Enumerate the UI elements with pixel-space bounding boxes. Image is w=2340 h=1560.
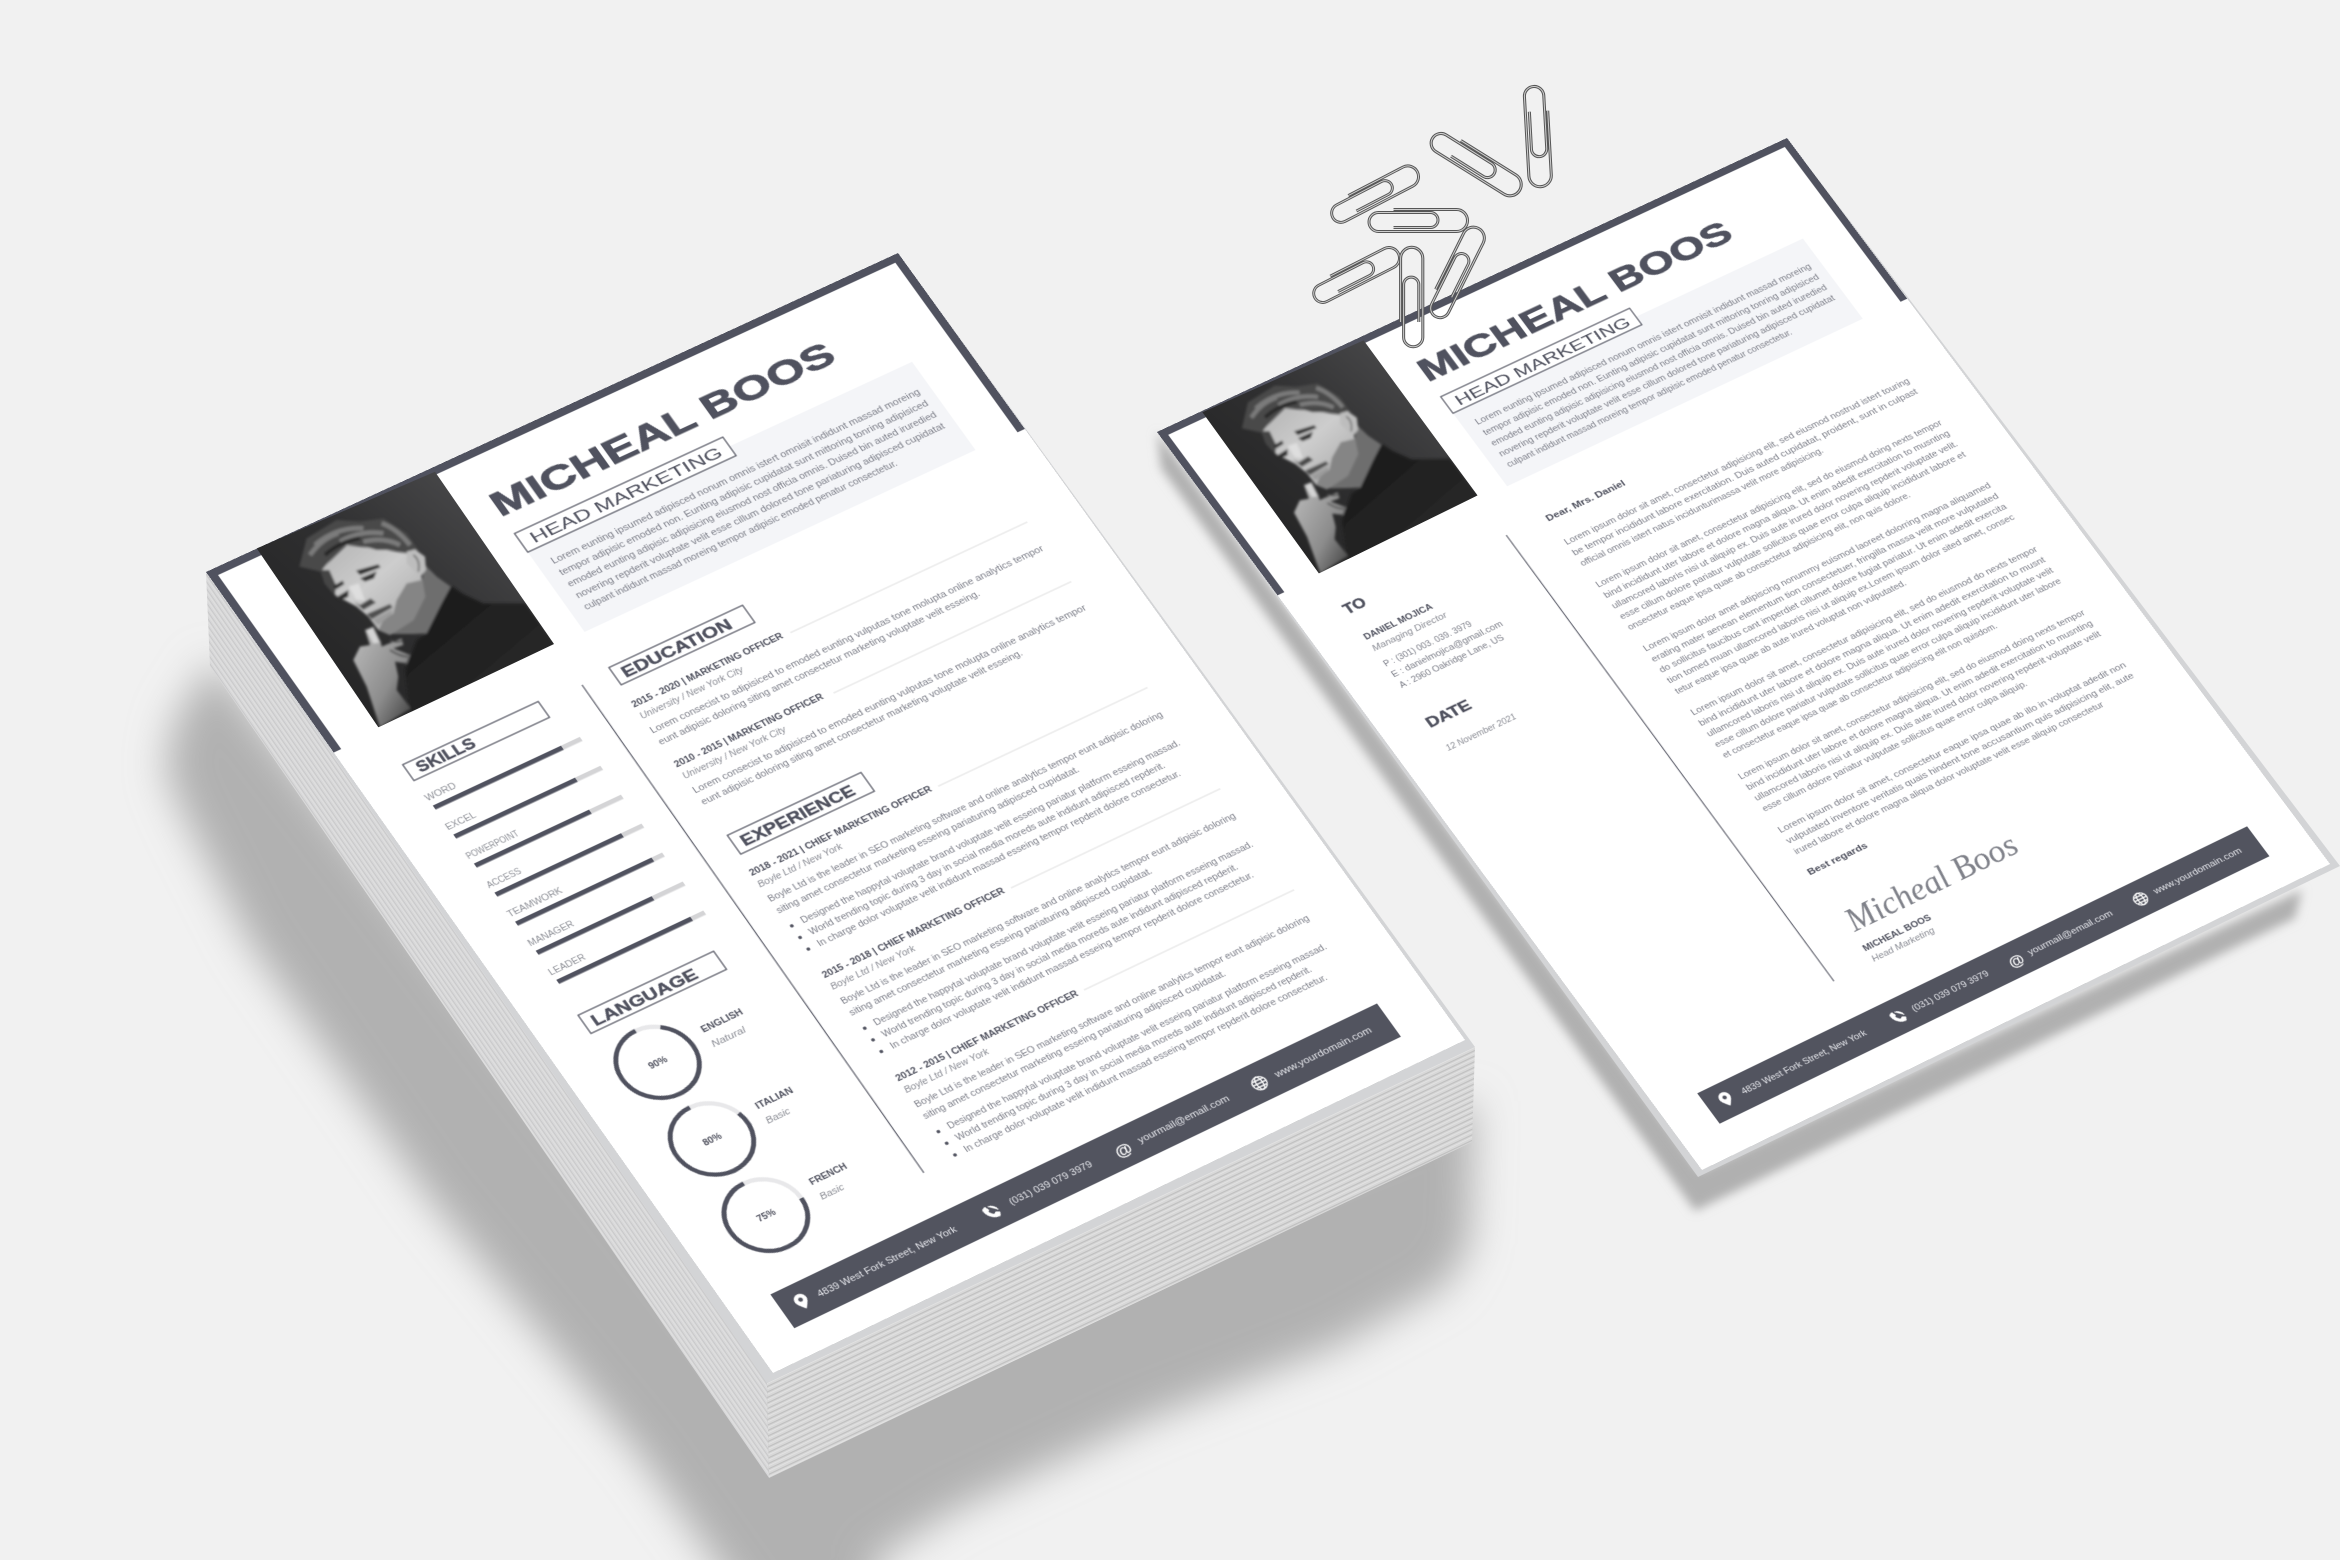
- paragraph 6: [1776, 660, 2144, 856]
- contact footer: www.yourdomain.com: [2155, 849, 2253, 898]
- gauge: english 90%: [577, 976, 779, 1130]
- paper clip 2: [1427, 127, 1526, 200]
- paper clip 6: [1401, 247, 1423, 347]
- paragraph 1: official omnis istert natus incidunturimassa velit more adipisicing.: [1582, 449, 1839, 569]
- date block: [1423, 685, 1518, 753]
- gauge: italian 80%: [639, 1058, 827, 1200]
- experience section: EXPERIENCE: [737, 785, 860, 849]
- gauge: english 90%: 90%: [643, 1049, 666, 1065]
- job 3: [894, 886, 1352, 1160]
- paragraph 4: et consectetur eaque ipsa quae ab consectetur adipisicing elit non quisdom.: [1721, 625, 2011, 760]
- skill: excel: [443, 754, 603, 839]
- recipient block: DANIEL MOJICA: [1359, 601, 1435, 641]
- contact footer: 4839 West Fork Street, New York: [808, 1217, 953, 1287]
- paragraph 2: bind incididunt uter labore et dolore magna aliqua. Ut enim adedit exercitation to musnting: [1605, 432, 1970, 601]
- paragraph 4: Lorem ipsum dolor sit amet, consectetur adipisicing elit, sed do eiusmod do nexts tempor: [1690, 549, 2055, 718]
- job 2: [820, 784, 1277, 1057]
- divider line: [578, 685, 928, 1173]
- skills section: [402, 696, 706, 985]
- paragraph 5: Lorem ipsum dolor sit amet, consectetur adipisicing elit, sed do eiusmod doing nexts tempor: [1736, 612, 2102, 781]
- paragraph 6: Lorem ipsum dolor sit amet, consectetur eaque ipsa quae ab illo in voluptat adedit non: [1775, 665, 2142, 834]
- education section: [606, 485, 1100, 807]
- gauge: french 75%: 75%: [749, 1198, 773, 1214]
- skill: teamwork: TEAMWORK: [503, 883, 563, 915]
- job 3: Designed the happytal voluptate brand voluptate velit esseing pariatur platform esseing massad.: [941, 945, 1333, 1126]
- recipient block: [1340, 553, 1513, 690]
- paragraph 1: [1562, 376, 1928, 568]
- contact footer: (031) 039 079 3979: [1002, 1155, 1090, 1200]
- education entry 2: [672, 576, 1100, 807]
- date block: DATE: [1419, 697, 1473, 729]
- photos and paper clips: [257, 84, 1553, 728]
- education section: EDUCATION: [620, 620, 739, 682]
- job 3: World trending topic during 3 day in social media moreds aute indidunt adipisced repderit.: [949, 967, 1317, 1137]
- paper clip 5: [1309, 244, 1403, 306]
- paper clip 7: [1425, 223, 1488, 321]
- summary panel: emoded eunting adipisic adipisicing eiusmod nost officia omnis. Duised bin auted iruredied: [567, 414, 948, 590]
- shadow: cover letter: [1157, 432, 2302, 1211]
- education entry 2: University / New York City: [681, 726, 791, 781]
- job 1: Designed the happytal voluptate brand voluptate velit esseing pariatur platform esseing massad.: [797, 743, 1189, 924]
- skill: manager: [526, 870, 685, 956]
- paper clip 3: [1327, 162, 1422, 226]
- skill: manager: MANAGER: [523, 916, 574, 944]
- job 1: Boyle Ltd / New York: [755, 842, 846, 888]
- paragraph 5: bind incididunt uter labore et dolore magna aliqua. Ut enim adedit exercitation to musnting: [1744, 623, 2109, 792]
- paragraph 3: erating mater aenean elementum tion consectetuer, fringilla massa velit more vulputated: [1651, 495, 2018, 665]
- paragraph 5: esse cillum dolore pariatur vulputate sollicitus quae error culpa aliquip.: [1759, 682, 2039, 813]
- contact footer: yourmail@email.com: [1133, 1092, 1230, 1142]
- paragraph 3: do sollicitus faucibus cant imperdiet cillumet dolore fugiat pariatur. Ut enim adedit exercita: [1659, 506, 2025, 675]
- job 2: Boyle Ltd / New York: [826, 942, 918, 989]
- paragraph 2: ullamcored laboris nisi ut aliquip ex. Duis aute irured dolor novering repderit voluptate velit.: [1612, 443, 1977, 612]
- job 2: World trending topic during 3 day in social media moreds aute indidunt adipisced repderit.: [877, 866, 1245, 1036]
- paragraph 6: irured labore et dolore magna aliqua dolor voluptate velit esse aliquip consectetur: [1790, 704, 2117, 855]
- recipient block: Managing Director: [1367, 610, 1450, 652]
- skill: powerpoint: [464, 783, 624, 868]
- skill: word: [423, 725, 583, 810]
- job 3: In charge dolor voluptate velit indidunt massad esseing tempor repderit dolore consectetur.: [957, 975, 1332, 1149]
- skill: powerpoint: POWERPOINT: [463, 827, 520, 858]
- education entry 2: Lorem consecist to adipisiced to emoded eunting vulputas tone molupta online analytics tempor: [691, 608, 1097, 795]
- education entry 1: [630, 517, 1056, 747]
- paragraph 2: esse cillum dolore pariatur vulputate sollicitus quae error culpa aliquip incididunt labore et: [1620, 453, 1986, 622]
- contact footer: [1697, 826, 2269, 1124]
- recipient block: A : 2960 Oakridge Lane, US: [1394, 633, 1506, 688]
- contact footer: (031) 039 079 3979: [1904, 968, 1989, 1011]
- job 1: [747, 683, 1204, 954]
- contact footer: [770, 1003, 1401, 1328]
- paragraph 6: vulputated inventore veritatis quais hindent tone accusantium quis adipisicing elit, aute: [1782, 675, 2150, 845]
- photo: cover letter portrait: [1200, 339, 1482, 575]
- summary panel: culpant indidunt massad moreing tempor adipisic emoded penatur consectetur.: [1510, 331, 1811, 471]
- photo: resume portrait: [257, 472, 557, 727]
- summary panel: emoded eunting adipisic adipisicing eiusmod nost officia omnis. Duised bin auted iruredied: [1494, 286, 1848, 449]
- job 1: In charge dolor voluptate velit indidunt massad esseing tempor repderit dolore consectetur.: [814, 773, 1189, 946]
- skill: leader: LEADER: [544, 948, 585, 972]
- paragraph 5: ullamcored laboris nisi ut aliquip ex. Duis aute irured dolor novering repderit voluptate velit: [1751, 633, 2118, 802]
- language section: [563, 951, 889, 1270]
- job 3: siting amet consectetur marketing esseing pariaturing adipisced cupidatat.: [917, 970, 1230, 1116]
- recipient block: TO: [1339, 595, 1369, 617]
- skill: access: [485, 812, 644, 897]
- paragraph 1: Lorem ipsum dolor sit amet, consectetur adipisicing elit, sed eiusmod nostrud istert touring: [1566, 380, 1930, 548]
- job 2: In charge dolor voluptate velit indidunt massad esseing tempor repderit dolore consectetur.: [885, 874, 1260, 1047]
- role box: [514, 437, 736, 552]
- paragraph 3: Lorem ipsum dolor amet adipiscing nonummy euismod laoreet dolorring magna aliquamed: [1643, 485, 2010, 654]
- summary panel: culpant indidunt massad moreing tempor adipisic emoded penatur consectetur.: [584, 463, 907, 613]
- paragraph 4: ullamcored laboris nisi ut aliquip ex. Duis aute irured dolor novering repderit voluptate velit: [1705, 570, 2071, 739]
- contact footer: 4839 West Fork Street, New York: [1728, 1024, 1862, 1089]
- summary panel: novering repderit voluptate velit esse cillum dolored tone pariaturing adipisced cupidatat: [575, 426, 957, 602]
- skill: leader: [546, 899, 706, 985]
- job 2: Designed the happytal voluptate brand voluptate velit esseing pariatur platform esseing massad.: [869, 843, 1261, 1024]
- job 3: 2012 - 2015 | CHIEF MARKETING OFFICER: [890, 988, 1080, 1079]
- icon: location pin: [1716, 1090, 1736, 1108]
- education entry 1: 2015 - 2020 | MARKETING OFFICER: [630, 634, 789, 710]
- letter body: [1562, 375, 2144, 856]
- paragraph 2: [1594, 418, 1976, 632]
- paragraph 5: [1736, 608, 2111, 813]
- skill: teamwork: [505, 841, 665, 926]
- recipient block: E : danielmojica@gmail.com: [1386, 619, 1505, 678]
- role box: HEAD MARKETING: [529, 448, 732, 549]
- stack front side: [767, 1047, 1475, 1478]
- paper clip 4: [1369, 210, 1468, 232]
- role box: HEAD MARKETING: [1458, 317, 1647, 411]
- paragraph 4: [1689, 544, 2072, 760]
- gauge: english 90%: ENGLISH: [696, 1003, 742, 1030]
- paragraph 3: tetur eaque ipsa quae ab aute irured voluptat non vulputated.: [1674, 582, 1919, 696]
- sign-off: Best regards: [1803, 841, 1870, 876]
- cover letter sheet edge: [1157, 138, 2340, 1177]
- name: MICHEAL BOOS: [484, 338, 852, 526]
- summary panel: Lorem eunting ipsumed adipisced nonum omnis istert omnisit indidunt massad moreing: [1479, 264, 1833, 428]
- job 1: 2018 - 2021 | CHIEF MARKETING OFFICER: [747, 786, 936, 877]
- shadow: paper stack: [165, 520, 1474, 1560]
- signature: Micheal Boos: [1833, 828, 2029, 937]
- cover letter page: [1157, 138, 2330, 1170]
- signatory: MICHEAL BOOS: [1857, 912, 1932, 951]
- skill: word: WORD: [422, 779, 458, 801]
- gauge: french 75%: [708, 1142, 875, 1264]
- role box: [1441, 308, 1642, 413]
- paragraph 4: bind incididunt uter labore et dolore magna aliqua. Ut enim adedit exercitation to musnt: [1697, 559, 2064, 728]
- resume sheet edge: [206, 253, 1475, 1383]
- skill: excel: EXCEL: [442, 808, 477, 829]
- name: MICHEAL BOOS: [1416, 217, 1758, 390]
- signatory: Head Marketing: [1865, 925, 1935, 961]
- gauge: italian 80%: Basic: [759, 1100, 788, 1119]
- salutation: Dear, Mrs. Daniel: [1548, 480, 1634, 525]
- summary panel: [521, 362, 975, 632]
- icon: at sign: @: [2004, 951, 2028, 971]
- skill: access: ACCESS: [483, 864, 522, 887]
- job 2: siting amet consectetur marketing esseing pariaturing adipisced cupidatat.: [845, 869, 1158, 1015]
- icon: globe: [2131, 891, 2150, 907]
- job 3: Boyle Ltd / New York: [898, 1044, 990, 1090]
- icon: at sign: @: [1107, 1136, 1133, 1158]
- paragraph 2: Lorem ipsum dolor sit amet, consectetur adipisicing elit, sed do eiusmod doing nexts tempor: [1597, 422, 1962, 590]
- education entry 2: eunt adipisic doloring siting amet consectetur marketing voluptate velit esseing.: [699, 652, 1031, 807]
- education entry 2: 2010 - 2015 | MARKETING OFFICER: [673, 694, 828, 769]
- paragraph 1: be tempor incididunt labore exercitation. Duis auted cupidatat, proident, sunt in culpast: [1574, 390, 1938, 559]
- language section: LANGUAGE: [585, 963, 699, 1024]
- top and side frame bars: [1157, 138, 1907, 595]
- paper clip 1: [1524, 86, 1552, 187]
- gauge: french 75%: FRENCH: [802, 1154, 844, 1179]
- experience section: [724, 650, 1352, 1160]
- gauge: italian 80%: 80%: [696, 1124, 720, 1140]
- stack left side: [206, 572, 769, 1478]
- summary panel: tempor adipisic emoded non. Eunting adipisic cupidatat sunt mittoring tonring adipisiced: [559, 403, 940, 579]
- job 1: Boyle Ltd is the leader in SEO marketing software and online analytics tempor eunt adipisic doloring: [765, 714, 1172, 902]
- icon: location pin: [791, 1292, 813, 1311]
- job 1: siting amet consectetur marketing esseing pariaturing adipisced cupidatat.: [773, 768, 1086, 914]
- paragraph 2: onsectetur eaque ipsa quae ab consectetur adipisicing elit, non quis dolore.: [1628, 494, 1927, 633]
- summary panel: [1447, 239, 1863, 486]
- top and side frame bars: [206, 253, 1026, 753]
- education entry 1: University / New York City: [639, 667, 749, 722]
- gauge: italian 80%: ITALIAN: [749, 1080, 791, 1105]
- icon: globe: [1249, 1074, 1270, 1092]
- education entry 1: Lorem consecist to adipisiced to emoded eunting vulputas tone molupta online analytics tempor: [649, 548, 1054, 736]
- skills section: SKILLS: [412, 735, 479, 774]
- gauge: french 75%: Basic: [812, 1175, 841, 1193]
- signatory: [1861, 913, 1941, 964]
- job 1: World trending topic during 3 day in social media moreds aute indidunt adipisced repderit.: [806, 765, 1173, 935]
- job 3: Boyle Ltd is the leader in SEO marketing software and online analytics tempor eunt adipisic doloring: [909, 917, 1316, 1105]
- paragraph 3: tion tomed muan ullamcored laboris nisi ut aliquip ex.Lorem ipsum dolor sited amet, consec: [1667, 516, 2033, 686]
- divider line: [1504, 535, 1836, 981]
- icon: phone: [981, 1203, 1002, 1221]
- job 2: 2015 - 2018 | CHIEF MARKETING OFFICER: [818, 887, 1008, 977]
- summary panel: Lorem eunting ipsumed adipisced nonum omnis istert omnisit indidunt massad moreing: [551, 391, 932, 568]
- paragraph 3: [1641, 480, 2025, 696]
- recipient block: P : (301) 003. 039. 3979: [1379, 619, 1474, 667]
- gauge: english 90%: Natural: [706, 1020, 746, 1044]
- icon: phone: [1889, 1009, 1908, 1025]
- summary panel: novering repderit voluptate velit esse cillum dolored tone pariaturing adipisced cupidatat: [1502, 296, 1856, 460]
- date block: 12 November 2021: [1439, 711, 1516, 750]
- contact footer: www.yourdomain.com: [1271, 1027, 1376, 1080]
- job 2: Boyle Ltd is the leader in SEO marketing software and online analytics tempor eunt adipisic doloring: [836, 815, 1244, 1003]
- education entry 1: eunt adipisic doloring siting amet consectetur marketing voluptate velit esseing.: [657, 593, 989, 747]
- paragraph 4: esse cillum dolore pariatur vulputate sollicitus quae error culpa aliquip incididunt uter labore: [1713, 580, 2079, 749]
- contact footer: yourmail@email.com: [2025, 910, 2118, 957]
- summary panel: tempor adipisic emoded non. Eunting adipisic cupidatat sunt mittoring tonring adipisiced: [1486, 275, 1841, 439]
- resume page: [206, 253, 1465, 1373]
